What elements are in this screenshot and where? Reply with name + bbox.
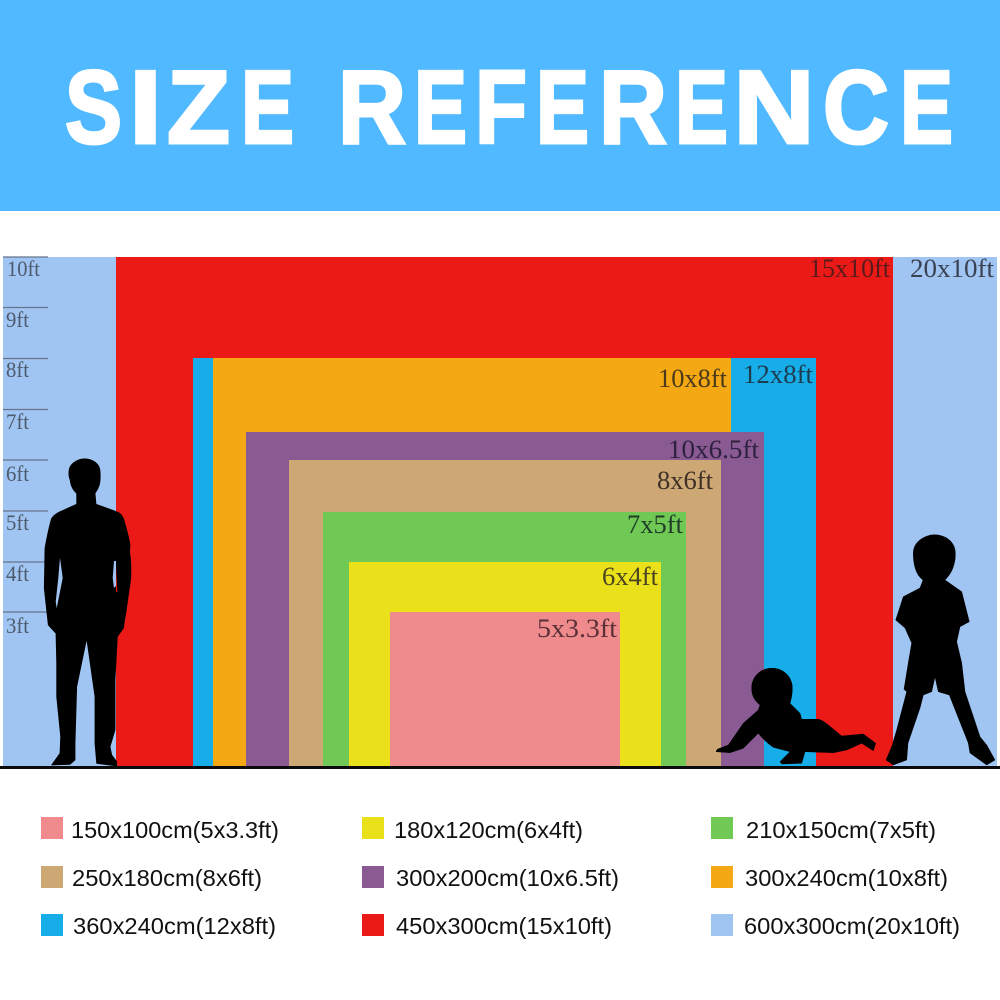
height ruler: 3ft: [6, 613, 29, 638]
panel: 10x8ft backdrop: [213, 358, 731, 767]
legend item: 300x240cm: 300x240cm(10x8ft): [745, 865, 948, 891]
height ruler: 4ft: [6, 561, 29, 586]
size chart: [3, 254, 997, 767]
title: E: [675, 50, 728, 166]
title: S: [65, 50, 122, 166]
ground line: [0, 766, 1000, 769]
title: N: [734, 50, 814, 166]
legend item: 150x100cm: 150x100cm(5x3.3ft): [71, 817, 279, 843]
panel: 7x5ft backdrop: [323, 510, 686, 767]
title: R: [599, 50, 667, 166]
height ruler: [3, 256, 48, 638]
panel: 5x3.3ft backdrop: [390, 612, 620, 767]
panel: 15x10ft backdrop: 15x10ft: [809, 254, 891, 283]
height ruler: 6ft: [6, 461, 29, 486]
height ruler: 7ft: [6, 409, 29, 434]
legend item: 300x200cm: 300x200cm(10x6.5ft): [396, 865, 619, 891]
header banner: [0, 0, 1000, 211]
legend: [41, 817, 960, 939]
title: E: [241, 50, 294, 166]
height ruler: 9ft: [6, 307, 29, 332]
panel: 12x8ft backdrop: 12x8ft: [743, 360, 814, 389]
height ruler: 8ft: [6, 357, 29, 382]
panel: 6x4ft backdrop: [349, 562, 661, 767]
title: I: [129, 50, 162, 166]
title: E: [900, 50, 953, 166]
icon: standing boy silhouette: [886, 534, 995, 765]
height ruler: 10ft: [7, 256, 40, 281]
title: R: [338, 50, 406, 166]
panel: 10x8ft backdrop: 10x8ft: [658, 364, 728, 393]
icon: crawling baby silhouette: [716, 668, 876, 764]
panel: 12x8ft backdrop: [193, 358, 816, 767]
panel: 10x6.5ft backdrop: [246, 432, 764, 767]
legend item: 360x240cm: 360x240cm(12x8ft): [73, 913, 276, 939]
panel: 20x10ft backdrop: 20x10ft: [910, 254, 995, 283]
title: C: [823, 50, 889, 166]
panel: 7x5ft backdrop: 7x5ft: [627, 510, 684, 539]
legend item: 250x180cm: 250x180cm(8x6ft): [72, 865, 262, 891]
panel: 10x6.5ft backdrop: 10x6.5ft: [668, 435, 760, 464]
icon: man silhouette: [44, 458, 131, 766]
title: Z: [167, 50, 230, 166]
panel: 6x4ft backdrop: 6x4ft: [602, 562, 659, 591]
legend item: 600x300cm: 600x300cm(20x10ft): [744, 913, 960, 939]
title: E: [536, 50, 589, 166]
panel: 5x3.3ft backdrop: 5x3.3ft: [537, 614, 618, 643]
title: E: [414, 50, 467, 166]
legend item: 450x300cm: 450x300cm(15x10ft): [396, 913, 612, 939]
panel: 8x6ft backdrop: 8x6ft: [657, 466, 714, 495]
legend item: 210x150cm: 210x150cm(7x5ft): [746, 817, 936, 843]
title: F: [475, 50, 527, 166]
height ruler: 5ft: [6, 510, 29, 535]
panel: 8x6ft backdrop: [289, 460, 721, 767]
legend item: 180x120cm: 180x120cm(6x4ft): [394, 817, 583, 843]
